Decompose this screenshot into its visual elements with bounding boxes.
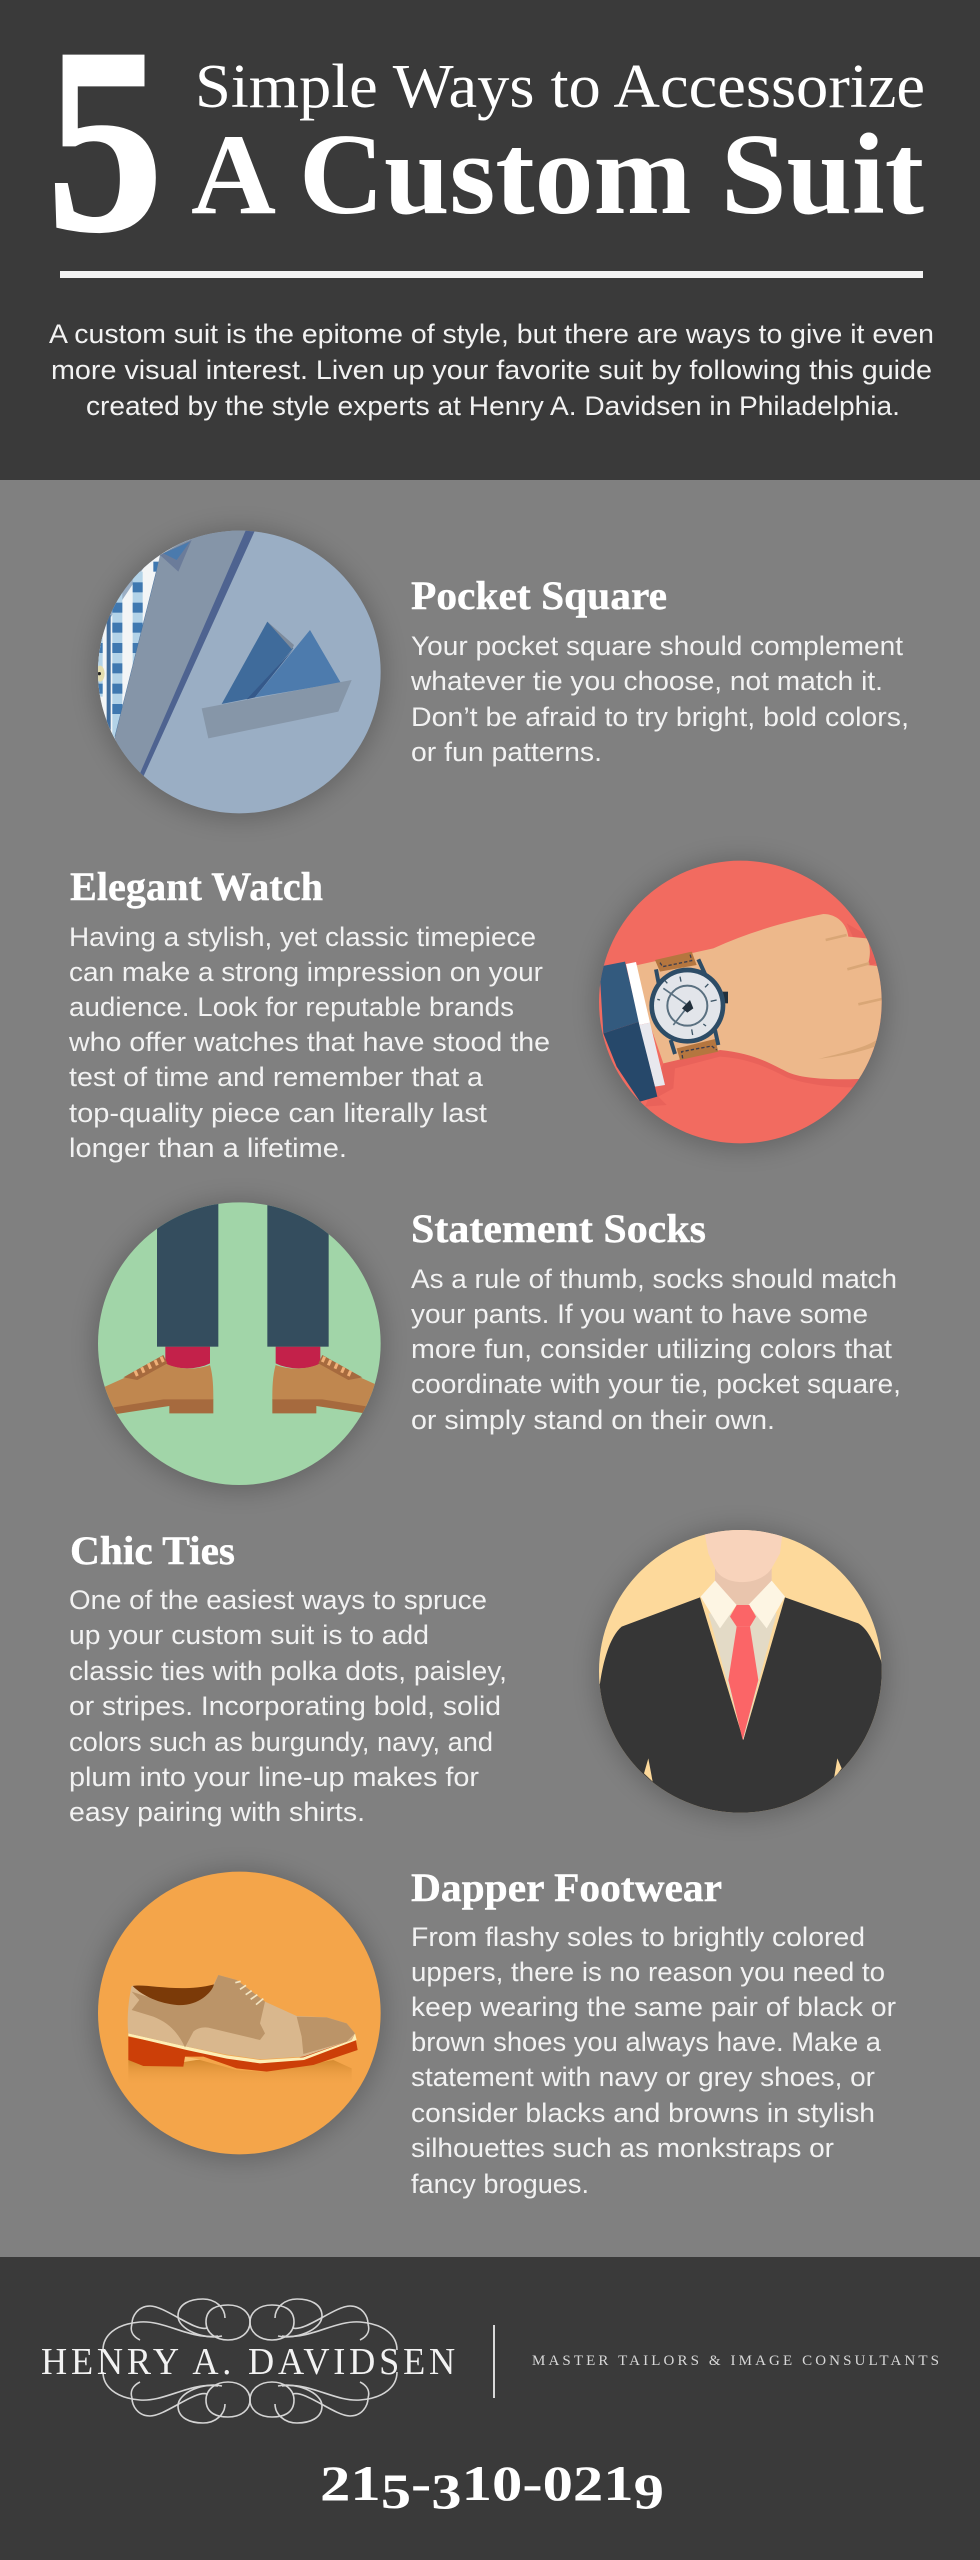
title line 2: A Custom Suit	[191, 111, 924, 239]
intro paragraph: created by the style experts at Henry A. Davidsen in Philadelphia.	[86, 391, 900, 421]
icon: shoe	[93, 1867, 387, 2161]
intro paragraph: more visual interest. Liven up your favorite suit by following this guide	[51, 355, 932, 385]
text: elegant watch: Having a stylish, yet classic timepiece	[69, 922, 536, 952]
title rule	[60, 271, 923, 278]
text: statement socks: more fun, consider utilizing colors that	[411, 1334, 893, 1364]
icon: wristwatch	[593, 857, 887, 1150]
panel: elegant watch	[68, 857, 887, 1163]
text: dapper footwear: From flashy soles to brightly colored	[411, 1922, 865, 1952]
panel: chic ties	[69, 1527, 887, 1827]
text: dapper footwear: silhouettes such as monkstraps or	[411, 2133, 834, 2163]
text: chic ties: up your custom suit is to add	[69, 1620, 429, 1650]
heading: elegant watch: Elegant Watch	[70, 864, 323, 909]
text: elegant watch: who offer watches that have stood the	[68, 1027, 550, 1057]
heading: chic ties: Chic Ties	[70, 1528, 235, 1573]
text: statement socks: As a rule of thumb, socks should match	[411, 1264, 897, 1294]
text: dapper footwear	[411, 1922, 896, 2199]
text: chic ties: plum into your line-up makes for	[69, 1762, 479, 1792]
text: elegant watch: top-quality piece can literally last	[69, 1098, 488, 1128]
text: statement socks: coordinate with your tie, pocket square,	[411, 1369, 901, 1399]
text: elegant watch: can make a strong impression on your	[69, 957, 543, 987]
text: dapper footwear: uppers, there is no reason you need to	[411, 1957, 885, 1987]
intro paragraph: A custom suit is the epitome of style, but there are ways to give it even	[49, 319, 934, 349]
text: dapper footwear: consider blacks and browns in stylish	[411, 2098, 875, 2128]
title line 1: Simple Ways to Accessorize	[195, 53, 925, 121]
panel: header	[0, 0, 980, 480]
big numeral 5: 5	[47, 0, 163, 287]
text: dapper footwear: statement with navy or grey shoes, or	[411, 2062, 875, 2092]
text: chic ties	[69, 1585, 507, 1827]
text: statement socks: or simply stand on their own.	[411, 1405, 775, 1435]
heading: dapper footwear: Dapper Footwear	[411, 1865, 722, 1910]
text: statement socks	[411, 1264, 901, 1435]
panel: dapper footwear	[93, 1865, 896, 2199]
logo flourish	[103, 2299, 397, 2423]
heading: statement socks: Statement Socks	[411, 1206, 706, 1251]
text: chic ties: or stripes. Incorporating bold, solid	[69, 1691, 501, 1721]
tagline: MASTER TAILORS & IMAGE CONSULTANTS	[532, 2353, 939, 2369]
text: elegant watch: audience. Look for reputable brands	[69, 992, 514, 1022]
text: pocket square: Your pocket square should complement	[411, 631, 904, 661]
text: elegant watch: longer than a lifetime.	[69, 1133, 347, 1163]
intro paragraph	[49, 319, 934, 421]
heading: pocket square: Pocket Square	[411, 573, 667, 618]
text: pocket square: Don’t be afraid to try bright, bold colors,	[411, 702, 909, 732]
icon: suit and tie	[593, 1527, 887, 1823]
icon: pocket square	[93, 527, 387, 820]
text: chic ties: colors such as burgundy, navy, and	[69, 1727, 493, 1757]
panel: statement socks	[93, 1197, 901, 1492]
text: dapper footwear: keep wearing the same pair of black or	[411, 1992, 896, 2022]
text: elegant watch: test of time and remember that a	[69, 1062, 484, 1092]
text: chic ties: easy pairing with shirts.	[69, 1797, 365, 1827]
text: chic ties: classic ties with polka dots, paisley,	[69, 1656, 507, 1686]
text: pocket square: or fun patterns.	[411, 737, 602, 767]
text: pocket square	[410, 631, 909, 767]
text: elegant watch	[68, 922, 550, 1163]
text: chic ties: One of the easiest ways to spruce	[69, 1585, 487, 1615]
text: dapper footwear: brown shoes you always have. Make a	[411, 2027, 882, 2057]
text: pocket square: whatever tie you choose, not match it.	[410, 666, 883, 696]
icon: socks and shoes	[93, 1197, 387, 1492]
text: statement socks: your pants. If you want to have some	[411, 1299, 868, 1329]
phone number: 215-310-0219	[320, 2455, 664, 2519]
logo divider	[493, 2325, 495, 2398]
panel: pocket square	[93, 527, 909, 820]
panel: footer	[0, 2257, 980, 2560]
text: dapper footwear: fancy brogues.	[411, 2169, 589, 2199]
logo wordmark: HENRY A. DAVIDSEN	[41, 2341, 459, 2383]
